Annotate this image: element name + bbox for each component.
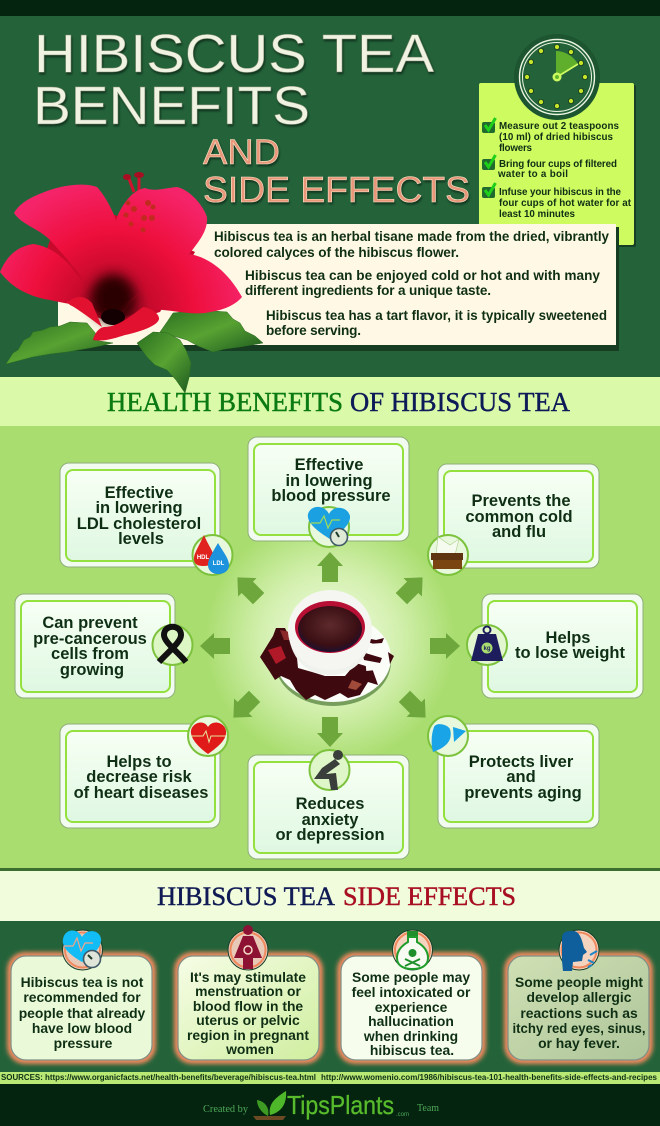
box: cholesterol	[60, 463, 220, 567]
box: pre-cancerous: cells from	[51, 645, 129, 663]
icon: check 1	[482, 118, 496, 133]
heading: health benefits: HEALTH BENEFITS	[107, 387, 343, 417]
text: steps: least 10 minutes	[499, 209, 576, 220]
icon: plant logo	[253, 1091, 286, 1120]
icon: liver	[428, 716, 468, 756]
box: lose weight: Helps	[546, 629, 590, 647]
card: hallucination	[337, 952, 486, 1064]
tea	[295, 601, 365, 653]
icon: weight: kg	[483, 646, 491, 652]
card: low blood pressure: people that already	[19, 1005, 146, 1021]
card: allergic reactions: or hay fever.	[538, 1035, 620, 1051]
arrow: up-left	[228, 568, 268, 608]
box: anxiety: Reduces	[296, 795, 364, 813]
box: blood pressure: in lowering	[285, 472, 373, 490]
box: blood pressure: blood pressure	[271, 487, 391, 505]
box: cholesterol: LDL cholesterol	[77, 515, 201, 533]
card: allergic reactions: Some people might	[515, 974, 643, 990]
box: lose weight: to lose weight	[515, 644, 626, 662]
card: pregnant women: blood flow in the	[193, 998, 303, 1014]
card: low blood pressure	[7, 952, 156, 1064]
saucer shadow	[275, 618, 391, 706]
card: allergic reactions	[504, 952, 653, 1064]
icon: HDL LDL drops: LDL	[213, 561, 225, 567]
arrow: down-left	[224, 687, 264, 727]
teacup illustration	[260, 590, 394, 706]
text: steps	[497, 121, 632, 220]
card: allergic reactions: itchy red eyes, sinus,	[512, 1020, 646, 1036]
header background	[0, 0, 660, 376]
arrow: down-right	[395, 687, 435, 727]
title: AND	[203, 133, 280, 172]
arrow: up	[317, 552, 343, 582]
box: cold and flu: Prevents the	[471, 492, 571, 510]
centre glow	[205, 515, 455, 765]
text: sources: http://www.womenio.com/1986/hibiscus-tea-101-health-benefits-side-effects-and-recipes	[321, 1073, 658, 1082]
stamen	[123, 172, 144, 240]
panel: introduction	[58, 224, 619, 351]
box: blood pressure	[248, 437, 409, 541]
cup	[288, 630, 372, 675]
icon: heart	[188, 716, 228, 756]
icon: HDL LDL drops	[192, 535, 232, 575]
text: steps: (10 ml) of dried hibiscus	[499, 132, 614, 143]
box: liver	[438, 724, 599, 828]
card: low blood pressure: recommended for	[23, 989, 141, 1005]
footer background	[0, 1084, 660, 1126]
panel: introduction: different ingredients for a unique taste.	[245, 283, 491, 298]
dried hibiscus	[260, 628, 394, 700]
benefits heading band	[0, 377, 660, 426]
box: cholesterol: in lowering	[95, 499, 183, 517]
box: heart diseases: Helps to	[106, 753, 172, 771]
heading: health benefits: OF HIBISCUS TEA	[350, 387, 570, 417]
heading: side effects: HIBISCUS TEA	[157, 882, 335, 911]
anthers	[124, 200, 156, 232]
icon: pregnant woman	[228, 925, 268, 970]
icon: weight	[467, 625, 507, 665]
icon: sneezing face	[559, 930, 599, 971]
text: steps: four cups of hot water for at	[499, 198, 632, 209]
arrow: right	[430, 633, 460, 659]
icon: check 3	[482, 183, 496, 198]
box: liver: prevents aging	[464, 784, 582, 802]
icon: HDL LDL drops: HDL	[197, 555, 209, 561]
panel: preparation steps	[479, 34, 636, 247]
card: hallucination: feel intoxicated or	[352, 984, 471, 1000]
card: hallucination: when drinking	[363, 1028, 458, 1044]
box: heart diseases	[60, 724, 220, 828]
flower illustration	[0, 172, 263, 393]
title: BENEFITS	[33, 76, 310, 136]
box: anxiety	[248, 755, 409, 859]
box: heart diseases: of heart diseases	[74, 784, 208, 802]
cup handle	[362, 643, 386, 668]
panel: benefits background	[0, 426, 660, 868]
box: heart diseases: decrease risk	[86, 768, 193, 786]
box: blood pressure: Effective	[295, 456, 363, 474]
box: liver: Protects liver	[469, 753, 574, 771]
box: liver: and	[506, 768, 536, 786]
box: cholesterol: Effective	[105, 484, 173, 502]
box: cold and flu: common cold	[465, 508, 573, 526]
card: pregnant women: women	[225, 1041, 274, 1057]
side effects heading band	[0, 871, 660, 921]
text: sources: SOURCES: https://www.organicfacts.net/health-benefits/beverage/hibiscus-tea.html	[1, 1073, 316, 1082]
title: SIDE EFFECTS	[203, 169, 470, 210]
card: low blood pressure: pressure	[54, 1035, 113, 1051]
icon: poison bottle	[392, 930, 432, 970]
card: allergic reactions: develop allergic	[526, 989, 632, 1005]
card: pregnant women	[174, 952, 323, 1064]
card: hallucination: hallucination	[368, 1013, 454, 1029]
box: cold and flu	[438, 464, 599, 568]
footer credit	[203, 1090, 439, 1120]
divider	[0, 868, 660, 871]
box: cholesterol: levels	[118, 530, 164, 548]
icon: tissue box	[428, 535, 468, 575]
footer credit: TipsPlants	[287, 1090, 394, 1120]
card: pregnant women: It's may stimulate	[190, 969, 306, 985]
title	[33, 24, 470, 210]
lower petals	[67, 297, 159, 341]
leaves	[6, 310, 263, 393]
panel: introduction: Hibiscus tea is an herbal tisane made from the dried, vibrantly	[214, 229, 609, 244]
card: hallucination: Some people may	[352, 969, 470, 985]
box: lose weight	[482, 594, 643, 698]
arrow: up-right	[392, 568, 432, 608]
footer credit: .com	[396, 1112, 409, 1118]
flower throat	[91, 274, 135, 325]
card: pregnant women: region in pregnant	[187, 1027, 309, 1043]
icon: check 2	[482, 155, 496, 170]
text: steps: water to a boil	[497, 169, 568, 180]
panel: side effects background	[0, 921, 660, 1072]
icon: ribbon	[152, 625, 192, 665]
text: steps: flowers	[499, 143, 533, 154]
box: cold and flu: and flu	[492, 523, 546, 541]
text: steps: Infuse your hibiscus in the	[499, 187, 622, 198]
icon: blood pressure side effect	[62, 930, 102, 970]
footer credit: Created by	[203, 1103, 248, 1115]
icon: blood pressure	[308, 507, 350, 547]
text: steps: Measure out 2 teaspoons	[499, 121, 620, 132]
footer credit: Team	[417, 1102, 439, 1114]
card: pregnant women: menstruation or	[195, 983, 301, 999]
top dark band	[0, 0, 660, 16]
title: HIBISCUS TEA	[34, 24, 434, 84]
card: hallucination: hibiscus tea.	[370, 1042, 454, 1058]
petal base	[40, 215, 195, 325]
petals	[0, 185, 242, 318]
arrow: down	[317, 717, 343, 747]
heading: side effects: SIDE EFFECTS	[343, 882, 516, 911]
box: pre-cancerous: growing	[60, 661, 124, 679]
box: anxiety: anxiety	[302, 811, 359, 829]
sources bar	[0, 1072, 660, 1084]
card: low blood pressure: Hibiscus tea is not	[21, 974, 144, 990]
box: pre-cancerous: pre-cancerous	[33, 630, 147, 648]
card: pregnant women: uterus or pelvic	[196, 1012, 300, 1028]
card: allergic reactions: reactions such as	[520, 1005, 638, 1021]
saucer	[275, 614, 391, 702]
box: pre-cancerous	[15, 594, 175, 698]
box: pre-cancerous: Can prevent	[42, 614, 138, 632]
box: anxiety: or depression	[275, 826, 385, 844]
arrow: left	[200, 633, 230, 659]
panel: introduction: colored calyces of the hibiscus flower.	[214, 245, 459, 260]
card: low blood pressure: have low blood	[32, 1020, 132, 1036]
icon: clock	[514, 34, 600, 120]
text: steps: Bring four cups of filtered	[499, 159, 617, 170]
icon: sad person	[310, 750, 350, 790]
panel: introduction: Hibiscus tea can be enjoyed cold or hot and with many	[245, 268, 600, 283]
panel: introduction: before serving.	[266, 323, 361, 338]
card: hallucination: experience	[375, 999, 448, 1015]
panel: introduction: Hibiscus tea has a tart flavor, it is typically sweetened	[266, 308, 607, 323]
